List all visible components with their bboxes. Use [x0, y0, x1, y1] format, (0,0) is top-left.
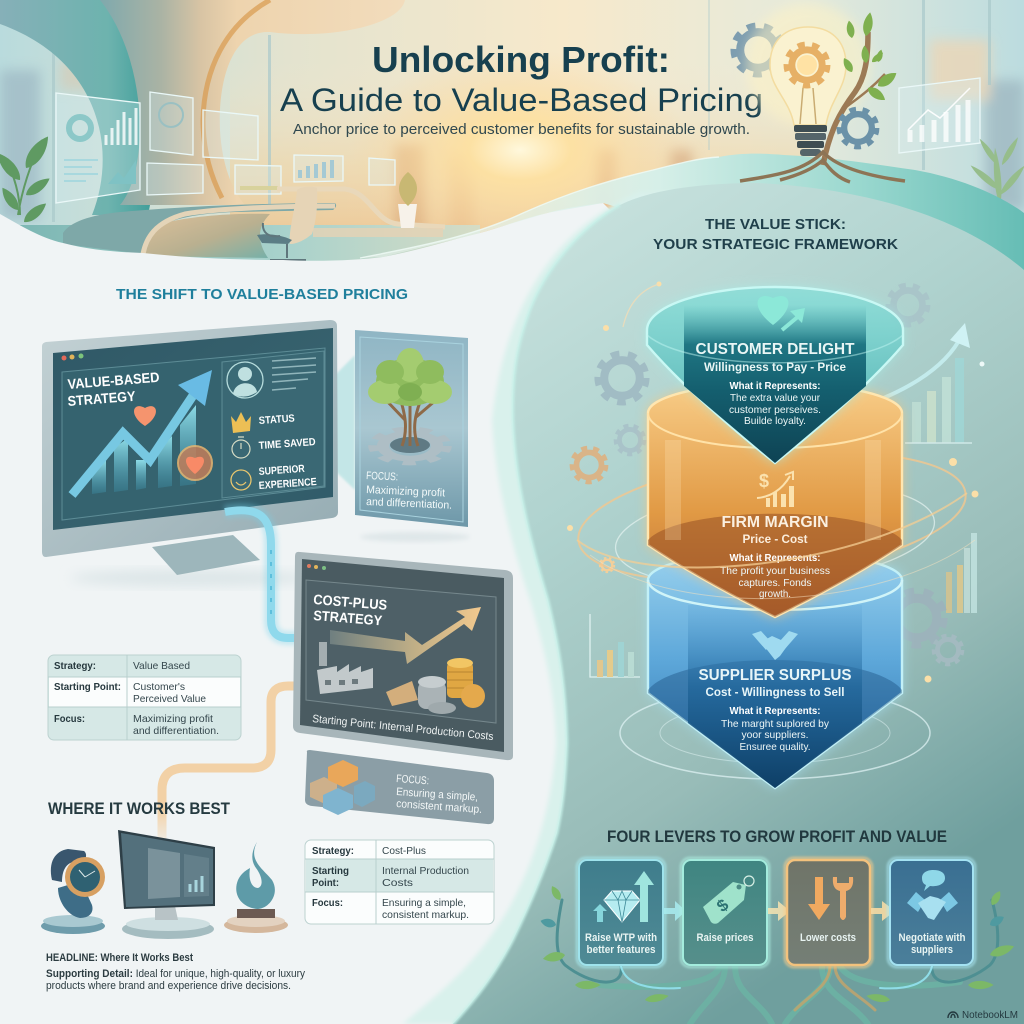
icon: factory [317, 642, 373, 694]
icon: luxury watch [41, 849, 105, 934]
text: customer delight: Builde loyalty. [744, 415, 806, 427]
strategy label: VALUE-BASED [67, 369, 160, 392]
icon: gear with tree [368, 348, 452, 463]
rear shelf [277, 189, 445, 227]
text: firm margin: growth. [759, 588, 791, 600]
section title: value stick: THE VALUE STICK: [705, 216, 846, 233]
starting point text: Starting Point: Internal Production Costs [312, 713, 494, 743]
banner illustration [0, 0, 1024, 270]
focus text: Maximizing profit [366, 484, 445, 499]
glow particles [567, 282, 984, 682]
lever card: negotiate: Negotiate with [898, 932, 966, 944]
text: customer delight: What it Represents: [730, 380, 820, 392]
center band [688, 605, 862, 788]
inner frame [62, 348, 325, 520]
heading: where it works best: WHERE IT WORKS BEST [48, 799, 231, 818]
text: customer delight: CUSTOMER DELIGHT [696, 341, 855, 358]
sparkle arc [623, 284, 659, 327]
icon: coins [386, 658, 485, 714]
monitor bezel [293, 552, 513, 760]
gears around value stick [572, 285, 962, 664]
panel: focus card cost [305, 750, 494, 824]
text: firm margin [720, 514, 830, 600]
orbit rings behind [571, 434, 973, 779]
icon: handshake [752, 631, 798, 660]
chart: right lower bars [946, 533, 977, 613]
text: customer delight: Willingness to Pay - Price [704, 360, 846, 374]
arrow: orange connector [162, 686, 303, 850]
icon: customer avatar [227, 362, 263, 398]
focus text: consistent markup. [396, 798, 482, 816]
desk edge [143, 206, 335, 254]
icon: light bulb [746, 3, 870, 156]
lever card: negotiate: suppliers [911, 944, 953, 956]
table: value based: Focus: [54, 713, 85, 725]
text: customer delight: The extra value your [730, 392, 820, 404]
wave line [360, 157, 719, 258]
focus text: FOCUS: [396, 773, 430, 787]
monitor stand [152, 535, 260, 575]
text: supplier surplus: yoor suppliers. [742, 729, 808, 741]
text: supplier surplus: Cost - Willingness to Sell [706, 685, 844, 699]
table: value based: Starting Point: [54, 681, 121, 693]
monitor bezel [42, 320, 338, 557]
benefits text: TIME SAVED [258, 436, 316, 452]
text: supplier surplus: Ensuree quality. [740, 741, 810, 753]
left plant [0, 133, 53, 226]
icon: price tag: $ [713, 895, 733, 916]
cost-plus label: COST-PLUS [313, 591, 388, 613]
benefits panel [222, 351, 324, 498]
lever card: raise prices: Raise prices [696, 932, 754, 944]
value stick: supplier surplus [648, 552, 902, 788]
lower shade [648, 514, 902, 617]
focus text: and differentiation. [366, 496, 452, 512]
table: cost-plus: Focus: [312, 897, 343, 909]
lever card: raise WTP: better features [586, 944, 656, 956]
monitor screen [53, 328, 333, 530]
panel: focus card value [355, 330, 470, 542]
glass panels [56, 78, 980, 203]
text: supplier surplus: SUPPLIER SURPLUS [698, 667, 852, 684]
tagline: Anchor price to perceived customer benefits for sustainable growth. [293, 122, 750, 138]
icon: dashboard monitor [118, 830, 215, 939]
panel: value-based monitor [42, 320, 338, 586]
vine leaves [539, 884, 1016, 1004]
text: firm margin: The profit your business [720, 565, 830, 577]
lever card: lower costs [785, 858, 872, 967]
value stick: firm margin [648, 383, 902, 617]
icon: tree on bulb [740, 12, 905, 182]
icon: flame award [224, 842, 288, 933]
panel edge [453, 205, 620, 1024]
floor [0, 225, 480, 265]
text: customer delight [696, 341, 855, 427]
title: Unlocking Profit: [372, 39, 670, 80]
strategy label [67, 369, 160, 409]
panel: cost-plus monitor [293, 552, 513, 760]
table: value based: Maximizing profit [133, 713, 213, 725]
panel: value stick background [453, 183, 1024, 1024]
heading: four levers: FOUR LEVERS TO GROW PROFIT AND VALUE [607, 828, 947, 846]
chart: right upper bars [850, 323, 972, 443]
text: supplier surplus: What it Represents: [730, 705, 820, 717]
lever card: raise WTP [577, 858, 665, 967]
table: value based: and differentiation. [133, 725, 219, 737]
table: value based: Perceived Value [133, 693, 206, 705]
table: cost-plus: Starting [312, 865, 349, 877]
text block: where it works best: HEADLINE: Where It Works Best [46, 952, 193, 964]
monitor screen [300, 559, 504, 752]
potted plant [398, 172, 417, 228]
benefits text [258, 413, 317, 492]
teal canopy swoosh [0, 0, 155, 215]
desk surface [63, 203, 336, 254]
arrow [871, 901, 895, 921]
text block: where it works best [46, 952, 305, 992]
section title: value stick [653, 216, 898, 253]
column highlight [203, 0, 270, 198]
text: firm margin: FIRM MARGIN [722, 514, 828, 531]
table: cost-plus: Costs [382, 877, 413, 889]
icon: cubes [310, 760, 375, 815]
icon: diamond [593, 871, 654, 922]
focus text [396, 773, 482, 816]
cost-plus label: STRATEGY [313, 607, 383, 628]
table: cost-plus: Ensuring a simple, [382, 897, 466, 909]
lower shade [648, 660, 902, 788]
benefits text: SUPERIOR [258, 463, 305, 478]
table: cost-plus: Point: [312, 877, 339, 889]
value stick: customer delight [647, 287, 903, 463]
icon: handshake speech [907, 870, 958, 920]
roots and vines [557, 900, 998, 1024]
mound wave [360, 154, 1024, 290]
icon: dollar growth [757, 471, 794, 507]
benefits text: EXPERIENCE [258, 476, 317, 492]
right plant [968, 136, 1024, 205]
rear bench [313, 228, 443, 237]
focus text: Ensuring a simple, [396, 786, 478, 804]
heart badge [178, 446, 212, 480]
orbit rings front [577, 493, 975, 599]
arrow: cost to price [330, 607, 481, 664]
table: cost-plus [305, 840, 494, 924]
text: firm margin: What it Represents: [730, 552, 820, 564]
lever card: raise prices [681, 858, 769, 967]
focus text [366, 470, 452, 512]
table: cost-plus: Cost-Plus [382, 845, 426, 857]
section title: shift: THE SHIFT TO VALUE-BASED PRICING [116, 286, 408, 303]
text: customer delight: customer perseives. [729, 404, 821, 416]
icon: heart arrow [758, 296, 805, 330]
center band [684, 305, 866, 463]
lever card: lower costs: Lower costs [800, 932, 856, 944]
icon: crown [231, 412, 251, 433]
strategy label: STRATEGY [67, 388, 137, 409]
text: supplier surplus [698, 667, 852, 753]
mint band beside panel [403, 192, 700, 1024]
text: supplier surplus: The marght suplored by [721, 718, 830, 730]
icon: smile [231, 470, 251, 490]
text: firm margin: captures. Fonds [738, 577, 812, 589]
icon: dollar growth: $ [759, 471, 769, 491]
arrow [664, 901, 686, 921]
table: cost-plus: Internal Production [382, 865, 469, 877]
chart bars [92, 405, 196, 494]
desk underside [145, 214, 270, 258]
lever card: raise WTP: Raise WTP with [585, 932, 657, 944]
office chair [257, 187, 317, 260]
table: value based: Strategy: [54, 660, 96, 672]
focus text: FOCUS: [366, 470, 398, 483]
benefits text: STATUS [258, 413, 295, 427]
lever card: negotiate [888, 858, 975, 967]
table: value based [48, 655, 241, 740]
left page background [0, 203, 700, 1024]
arrow [768, 901, 790, 921]
text block: where it works best: products where brand and experience drive decisions. [46, 980, 291, 992]
title [280, 39, 763, 138]
inner frame [306, 580, 496, 723]
table: value based: Value Based [133, 660, 190, 672]
watermark: NotebookLM: NotebookLM [962, 1009, 1018, 1021]
growth arrow [72, 385, 200, 495]
light stripes [665, 440, 881, 540]
text block: where it works best: Supporting Detail: Ideal for unique, high-quality, or luxury [46, 968, 305, 980]
text: firm margin: Price - Cost [742, 532, 808, 546]
table: cost-plus: consistent markup. [382, 909, 469, 921]
beige column [100, 0, 405, 205]
profile lines [272, 358, 316, 390]
chart: left lower bars [590, 614, 640, 677]
panel charts [64, 88, 970, 188]
arrow: blue connector [225, 510, 300, 638]
heart upper [134, 406, 156, 426]
subtitle: A Guide to Value-Based Pricing [280, 82, 763, 118]
table: cost-plus: Strategy: [312, 845, 354, 857]
table: value based: Customer's [133, 681, 185, 693]
icon: gear lower [839, 109, 877, 147]
icon: stopwatch [232, 437, 250, 458]
icon: arrow and wrench [808, 877, 853, 920]
section title: value stick: YOUR STRATEGIC FRAMEWORK [653, 236, 898, 253]
icon: gear top [734, 26, 782, 74]
light beam to focus card [310, 355, 355, 490]
cost-plus label [313, 591, 388, 628]
